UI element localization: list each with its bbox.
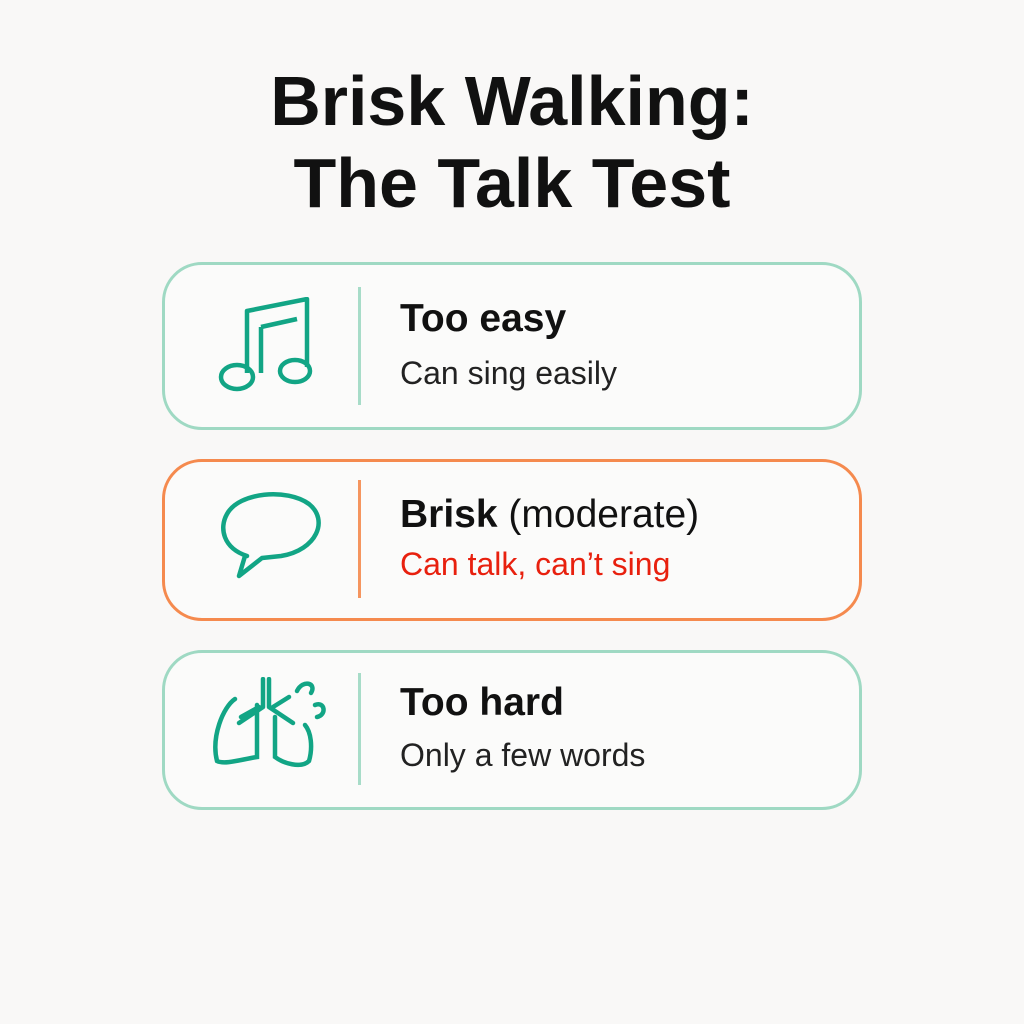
subtext: Only a few words bbox=[400, 737, 645, 773]
panel: brisk bbox=[162, 459, 862, 621]
divider bbox=[358, 480, 361, 598]
title bbox=[270, 62, 754, 222]
subtext: Can talk, can’t sing bbox=[400, 546, 670, 582]
icon: music note bbox=[218, 297, 312, 392]
subtext: Can sing easily bbox=[400, 355, 617, 391]
panel: too hard bbox=[162, 650, 862, 810]
icon: speech bubble bbox=[221, 492, 321, 578]
title: Brisk Walking: bbox=[270, 62, 754, 140]
heading: Brisk (moderate) bbox=[400, 493, 699, 536]
heading: Too hard bbox=[400, 681, 564, 724]
icon: lungs bbox=[213, 677, 326, 768]
title: The Talk Test bbox=[294, 144, 730, 222]
panel: too easy bbox=[162, 262, 862, 430]
heading: Too easy bbox=[400, 297, 566, 340]
divider bbox=[358, 673, 361, 785]
divider bbox=[358, 287, 361, 405]
